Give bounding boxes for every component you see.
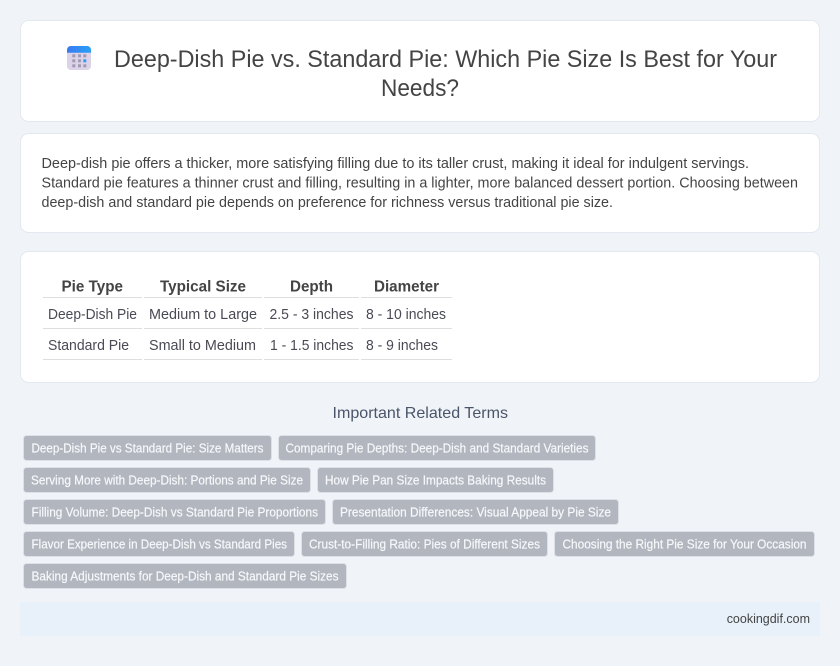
tag xyxy=(278,436,596,460)
panel: description xyxy=(20,134,820,232)
tag xyxy=(302,532,548,556)
tag: Crust-to-Filling Ratio: Pies of Different Sizes xyxy=(309,537,540,551)
table row: standard pie: Small to Medium xyxy=(149,338,256,354)
table header: Depth xyxy=(290,279,333,296)
tag xyxy=(24,532,294,556)
tag: Flavor Experience in Deep-Dish vs Standard Pies xyxy=(32,537,287,551)
tag: Presentation Differences: Visual Appeal by Pie Size xyxy=(340,505,611,519)
tag: Filling Volume: Deep-Dish vs Standard Pie Proportions xyxy=(32,505,318,519)
tag xyxy=(554,532,814,556)
title line 2: Needs? xyxy=(381,75,459,102)
footer xyxy=(20,602,820,636)
tag xyxy=(332,500,618,524)
table row: deep-dish pie: 2.5 - 3 inches xyxy=(270,307,354,323)
tag xyxy=(24,468,310,492)
panel: related term tags xyxy=(24,436,814,588)
tag xyxy=(24,436,272,460)
table header: Diameter xyxy=(374,279,439,296)
text: description line 2: Standard pie features a thinner crust and filling, resulting in a lighter, more balanced dessert portion. Choosing between xyxy=(42,175,798,192)
footer source text: cookingdif.com xyxy=(727,612,810,626)
panel: header xyxy=(20,20,820,122)
table header: Typical Size xyxy=(160,279,246,296)
table row: standard pie xyxy=(48,338,438,354)
tag: Choosing the Right Pie Size for Your Occasion xyxy=(562,537,807,551)
tag: Serving More with Deep-Dish: Portions and Pie Size xyxy=(31,473,303,487)
table row: deep-dish pie: Deep-Dish Pie xyxy=(48,307,137,323)
tag xyxy=(318,468,554,492)
heading: related terms: Important Related Terms xyxy=(332,405,508,422)
table row: standard pie: Standard Pie xyxy=(48,338,129,354)
text: description line 3: deep-dish and standard pie depends on preference for richness versus traditional pie size. xyxy=(42,194,613,211)
tag: How Pie Pan Size Impacts Baking Results xyxy=(325,473,546,487)
title: Deep-Dish Pie vs. Standard Pie: Which Pie Size Is Best for Your xyxy=(114,46,777,73)
tag xyxy=(24,500,326,524)
table header xyxy=(62,279,439,296)
tag: Comparing Pie Depths: Deep-Dish and Standard Varieties xyxy=(286,441,588,455)
table row: deep-dish pie: 8 - 10 inches xyxy=(366,307,446,323)
table row: deep-dish pie xyxy=(48,307,446,323)
tag: Deep-Dish Pie vs Standard Pie: Size Matters xyxy=(32,441,264,455)
icon: calendar xyxy=(67,46,91,70)
panel: comparison table xyxy=(20,252,820,382)
tag: Baking Adjustments for Deep-Dish and Standard Pie Sizes xyxy=(32,569,338,583)
text: description line 1: Deep-dish pie offers a thicker, more satisfying filling due to its taller crust, making it ideal for indulgent servings. xyxy=(42,155,749,172)
tag xyxy=(24,564,346,588)
table row: standard pie: 8 - 9 inches xyxy=(366,338,438,354)
table header: Pie Type xyxy=(62,279,123,296)
table row: deep-dish pie: Medium to Large xyxy=(149,307,257,323)
table row: standard pie: 1 - 1.5 inches xyxy=(270,338,354,354)
